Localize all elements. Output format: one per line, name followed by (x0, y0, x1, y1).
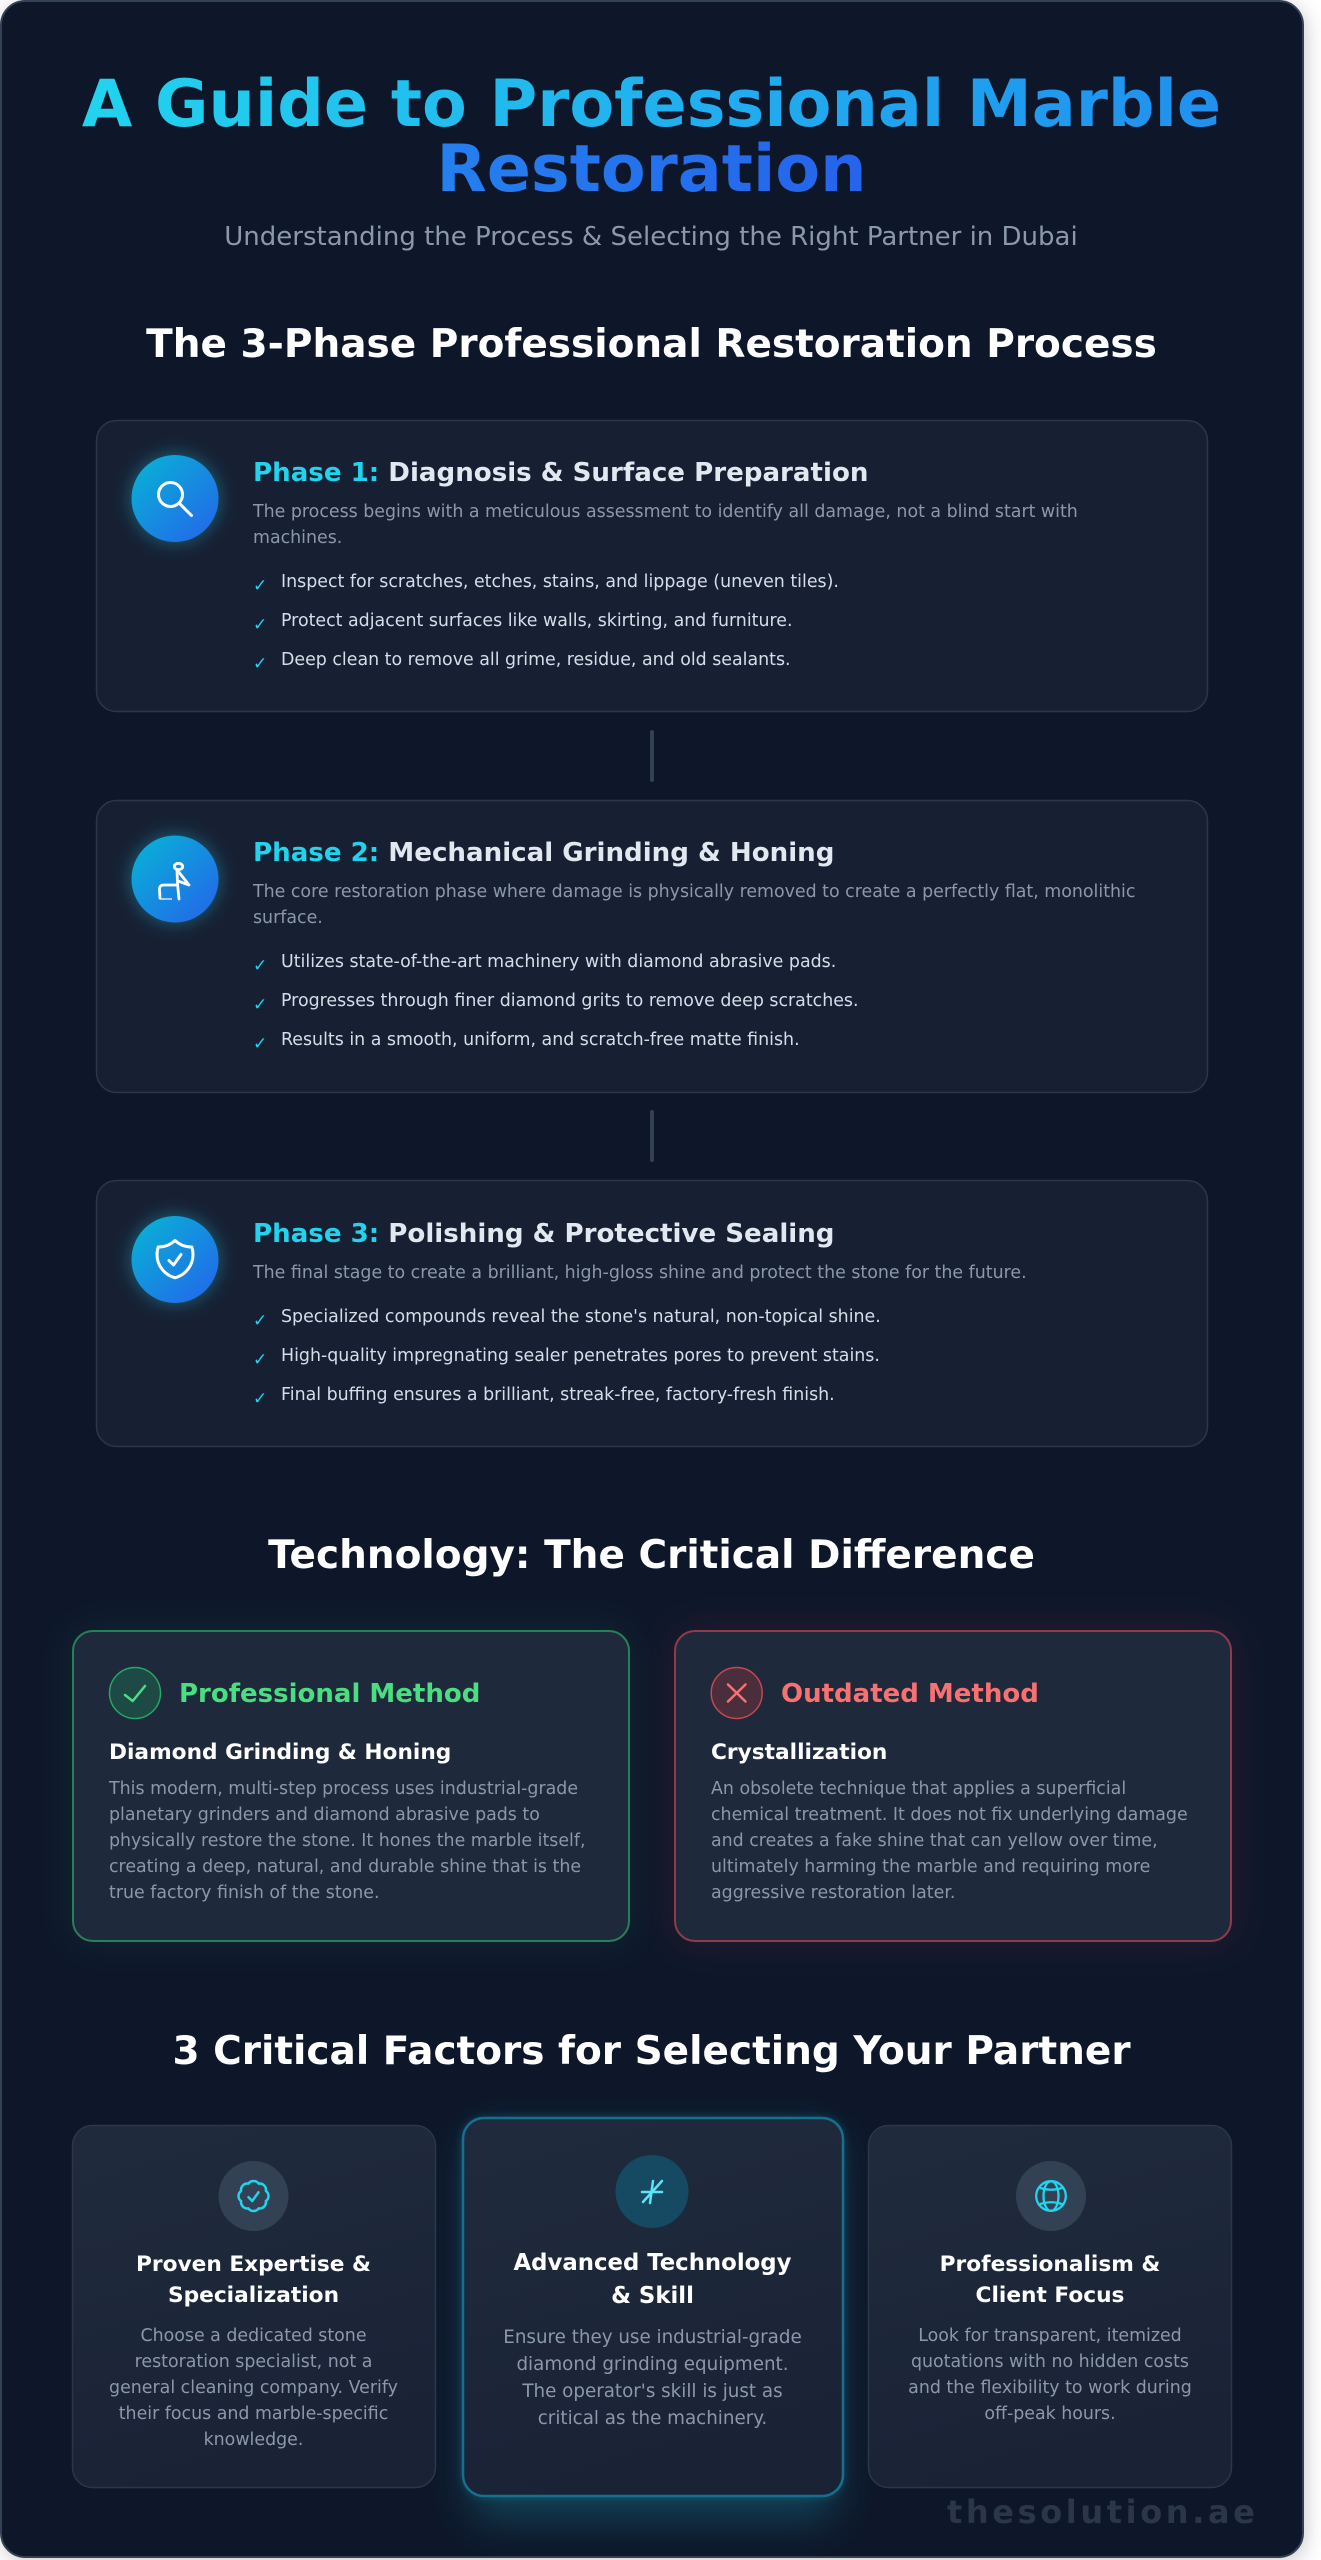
factor description: and the flexibility to work during (908, 2378, 1192, 2398)
phase 1 description: machines. (253, 528, 342, 548)
connector 1 (650, 730, 654, 782)
panel: professional method (73, 1631, 629, 1941)
subtitle: Understanding the Process & Selecting the Right Partner in Dubai (224, 222, 1078, 252)
factor heading: Proven Expertise & (136, 2252, 371, 2277)
icon: globe (1016, 2161, 1086, 2231)
title: Restoration (436, 131, 866, 207)
phase 1 description: The process begins with a meticulous assessment to identify all damage, not a blind start with (252, 502, 1078, 522)
icon: grinding operator (132, 836, 218, 922)
title: A Guide to Professional Marble (82, 66, 1221, 142)
phase 2 checklist: Progresses through finer diamond grits to remove deep scratches. (281, 991, 859, 1011)
factor description: Choose a dedicated stone (140, 2326, 367, 2346)
method subtitle: Diamond Grinding & Honing (109, 1740, 451, 1765)
phase 1 heading: Phase 1: Diagnosis & Surface Preparation (253, 458, 868, 488)
factor description (109, 2326, 398, 2450)
factor description: general cleaning company. Verify (109, 2378, 398, 2398)
phase 2 checklist: ✓ (253, 1034, 267, 1054)
factor description: restoration specialist, not a (135, 2352, 372, 2372)
factor description: Look for transparent, itemized (918, 2326, 1182, 2346)
phase 2 checklist: Results in a smooth, uniform, and scratch-free matte finish. (281, 1030, 800, 1050)
method description: and creates a fake shine that can yellow over time, (711, 1831, 1158, 1851)
heading: technology: Technology: The Critical Difference (268, 1533, 1035, 1578)
phase 3 heading: Phase 3: Polishing & Protective Sealing (253, 1219, 834, 1249)
method title: Professional Method (179, 1679, 480, 1709)
panel: outdated method (675, 1631, 1231, 1941)
phase 1 checklist (253, 572, 839, 674)
phase 3 checklist: ✓ (253, 1311, 267, 1331)
connector 2 (650, 1110, 654, 1162)
factor description: their focus and marble-specific (119, 2404, 388, 2424)
icon: search (132, 455, 218, 542)
method description: An obsolete technique that applies a superficial (711, 1779, 1126, 1799)
phase 2 heading: Phase 2: Mechanical Grinding & Honing (253, 838, 834, 868)
phase 3 checklist (253, 1307, 881, 1409)
method subtitle: Crystallization (711, 1740, 887, 1765)
factor description: off-peak hours. (984, 2404, 1116, 2424)
icon: shield check (132, 1216, 218, 1303)
panel: professionalism (868, 2126, 1232, 2488)
phase 2 checklist (253, 952, 859, 1054)
method description: creating a deep, natural, and durable shine that is the (109, 1857, 581, 1877)
method description: true factory finish of the stone. (109, 1883, 380, 1903)
title (82, 66, 1221, 207)
panel: phase 1 (96, 420, 1208, 712)
factor heading (940, 2252, 1160, 2308)
phase 1 checklist: Protect adjacent surfaces like walls, skirting, and furniture. (281, 611, 792, 631)
method description: This modern, multi-step process uses industrial-grade (108, 1779, 578, 1799)
panel: phase 2 (96, 800, 1208, 1092)
factor heading: Client Focus (976, 2283, 1124, 2308)
method description (108, 1779, 586, 1903)
method description: aggressive restoration later. (711, 1883, 955, 1903)
method description: chemical treatment. It does not fix underlying damage (711, 1805, 1188, 1825)
phase 2 description: The core restoration phase where damage is physically removed to create a perfectly flat, monolithic (252, 882, 1135, 902)
icon: cross (711, 1668, 762, 1718)
watermark: thesolution.ae (947, 2493, 1258, 2531)
factor description: diamond grinding equipment. (516, 2354, 789, 2375)
factor description: The operator's skill is just as (521, 2381, 783, 2402)
phase 2 checklist: ✓ (253, 995, 267, 1015)
factor heading: & Skill (611, 2283, 694, 2309)
phase 3 checklist: ✓ (253, 1389, 267, 1409)
factor description (503, 2327, 802, 2429)
icon: check (110, 1668, 160, 1718)
phase 2 description (252, 882, 1135, 928)
factor heading: Professionalism & (940, 2252, 1160, 2277)
icon: sparkle (616, 2155, 688, 2228)
factor heading (514, 2250, 792, 2309)
phase 1 checklist: ✓ (253, 576, 267, 596)
method title: Outdated Method (781, 1679, 1039, 1709)
heading: process: The 3-Phase Professional Restoration Process (146, 322, 1157, 367)
heading: factors: 3 Critical Factors for Selecting Your Partner (172, 2029, 1131, 2074)
phase 1 checklist: Inspect for scratches, etches, stains, and lippage (uneven tiles). (281, 572, 839, 592)
factor description (908, 2326, 1192, 2424)
method description: ultimately harming the marble and requiring more (711, 1857, 1150, 1877)
panel: phase 3 (96, 1180, 1208, 1446)
phase 3 checklist: Specialized compounds reveal the stone's natural, non-topical shine. (281, 1307, 881, 1327)
phase 1 checklist: ✓ (253, 615, 267, 635)
factor heading (136, 2252, 371, 2308)
panel: expertise (72, 2126, 436, 2488)
phase 3 checklist: High-quality impregnating sealer penetrates pores to prevent stains. (281, 1346, 880, 1366)
phase 2 description: surface. (253, 908, 323, 928)
phase 1 checklist: Deep clean to remove all grime, residue, and old sealants. (281, 650, 791, 670)
phase 1 checklist: ✓ (253, 654, 267, 674)
method description (711, 1779, 1188, 1903)
method description: planetary grinders and diamond abrasive pads to (109, 1805, 540, 1825)
phase 3 description: The final stage to create a brilliant, high-gloss shine and protect the stone for the future. (252, 1263, 1027, 1283)
factor description: Ensure they use industrial-grade (503, 2327, 802, 2348)
icon: badge (218, 2161, 288, 2231)
phase 2 checklist: ✓ (253, 956, 267, 976)
factor heading: Specialization (168, 2283, 339, 2308)
factor description: knowledge. (204, 2430, 303, 2450)
phase 1 description (252, 502, 1078, 548)
factor heading: Advanced Technology (514, 2250, 792, 2276)
method description: physically restore the stone. It hones the marble itself, (109, 1831, 586, 1851)
factor description: critical as the machinery. (538, 2408, 767, 2429)
phase 2 checklist: Utilizes state-of-the-art machinery with diamond abrasive pads. (281, 952, 836, 972)
phase 3 checklist: ✓ (253, 1350, 267, 1370)
panel: technology and skill (463, 2118, 843, 2520)
phase 3 checklist: Final buffing ensures a brilliant, streak-free, factory-fresh finish. (281, 1385, 835, 1405)
factor description: quotations with no hidden costs (911, 2352, 1189, 2372)
